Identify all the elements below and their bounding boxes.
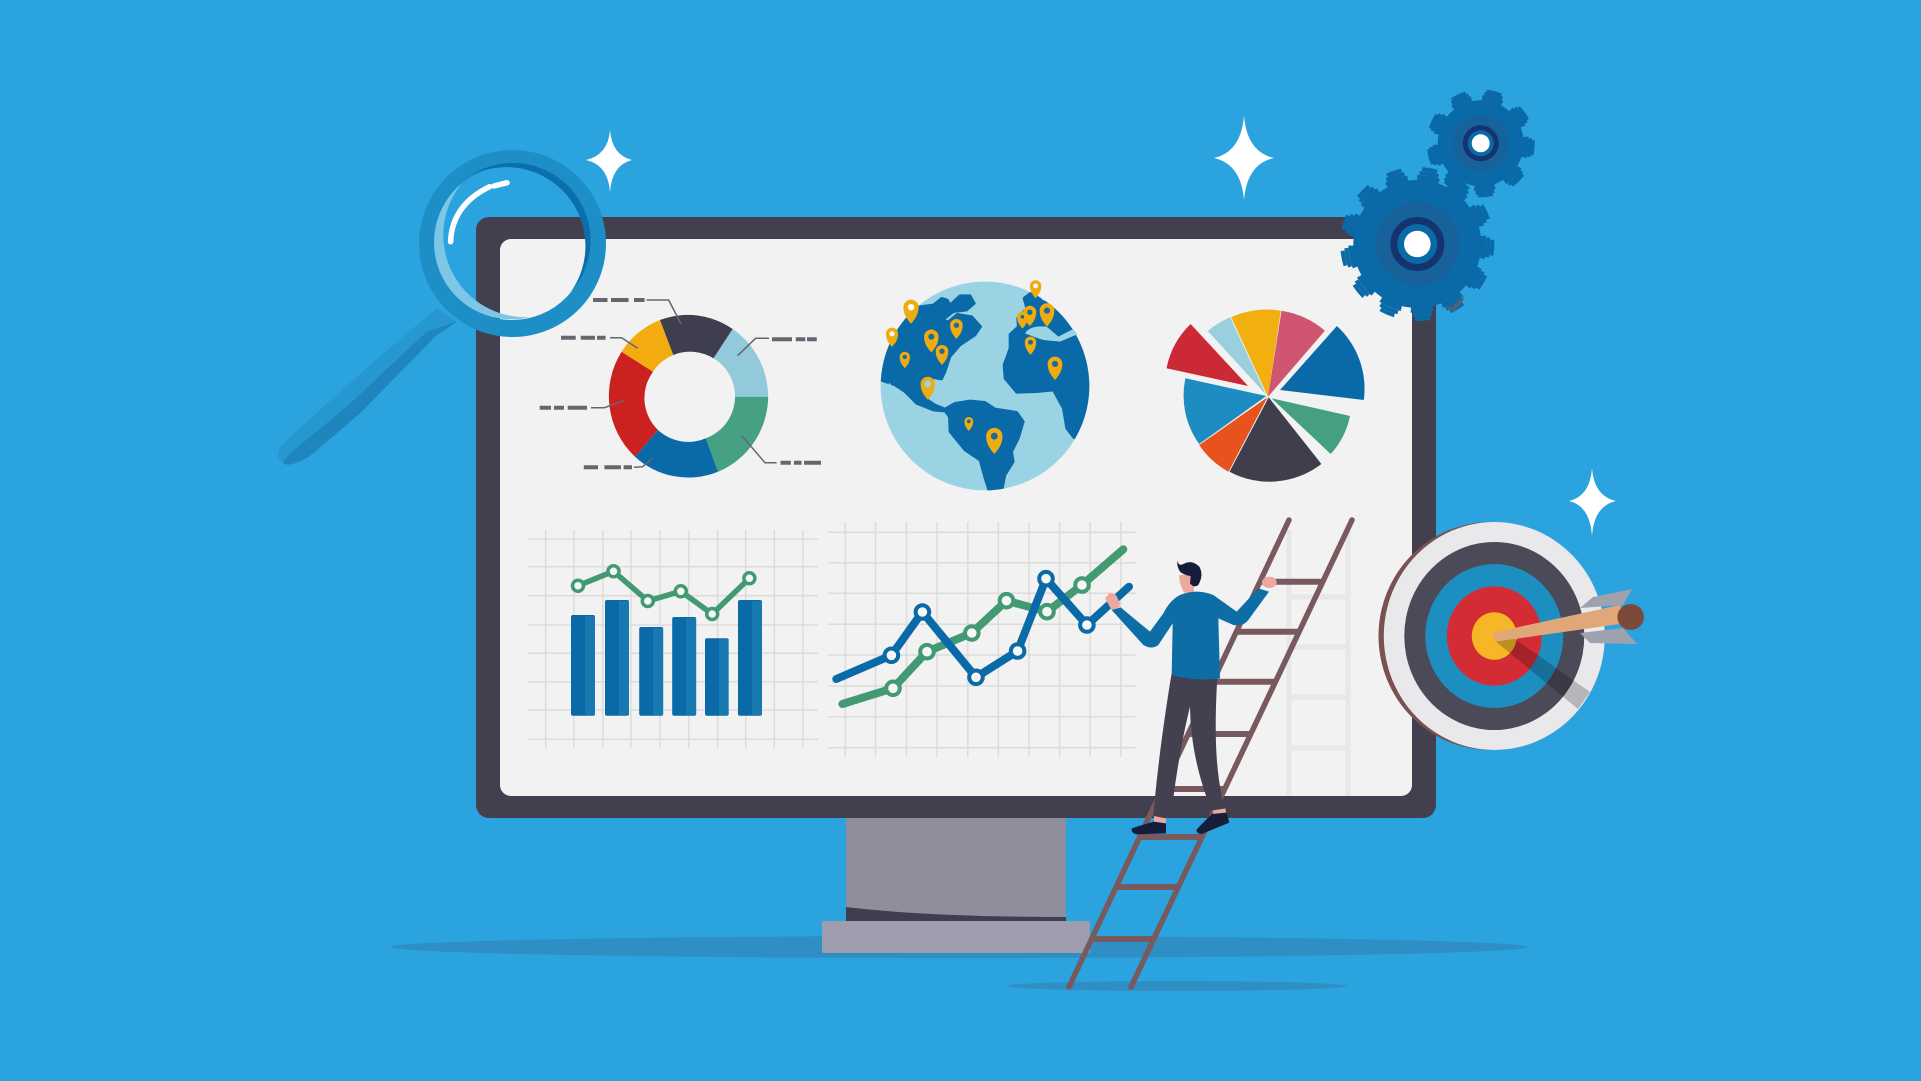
monitor screen: [500, 239, 1412, 796]
monitor frame: [476, 217, 1436, 818]
lens ring: [419, 150, 606, 337]
sparkle: top left: [586, 130, 632, 192]
arrow shadow: [1494, 632, 1590, 709]
person on ladder: [1105, 561, 1277, 834]
green series: [842, 549, 1123, 704]
location pins: [886, 280, 1062, 454]
lens highlight: [451, 183, 507, 242]
globe land: [877, 282, 1097, 492]
monitor stand: [822, 816, 1090, 953]
ghost ladder on screen: [1289, 530, 1348, 796]
arrow: [1493, 589, 1644, 644]
sparkle: top centre: [1214, 116, 1274, 200]
target with arrow: [1378, 522, 1644, 750]
exploded pie chart: [1166, 310, 1365, 482]
handle: [278, 308, 457, 465]
floor shadows: [391, 936, 1527, 991]
ladder: [1069, 520, 1352, 987]
illustration: analytics monitor scene: [278, 90, 1644, 991]
magnifying glass: [278, 150, 606, 465]
head: [1179, 575, 1194, 593]
bar chart trend line: [572, 566, 755, 620]
lens inner edge: [470, 163, 591, 293]
gears: [1339, 88, 1536, 323]
hair: [1177, 561, 1201, 586]
blue series: [836, 572, 1129, 684]
lens light edge: [434, 183, 530, 319]
sparkle: right: [1569, 468, 1616, 536]
legs: [1153, 673, 1224, 818]
hands: [1105, 577, 1277, 610]
bars: [571, 600, 762, 716]
gear smudge: [1443, 295, 1465, 311]
large gear: [1339, 165, 1496, 323]
sweater: [1112, 588, 1269, 679]
shoes: [1132, 808, 1229, 834]
small gear: [1425, 88, 1536, 199]
donut chart: [540, 300, 821, 478]
donut labels: [540, 300, 821, 467]
bar and line chart: [528, 530, 818, 748]
globe with location pins: [877, 280, 1097, 492]
double line chart: [828, 522, 1136, 757]
